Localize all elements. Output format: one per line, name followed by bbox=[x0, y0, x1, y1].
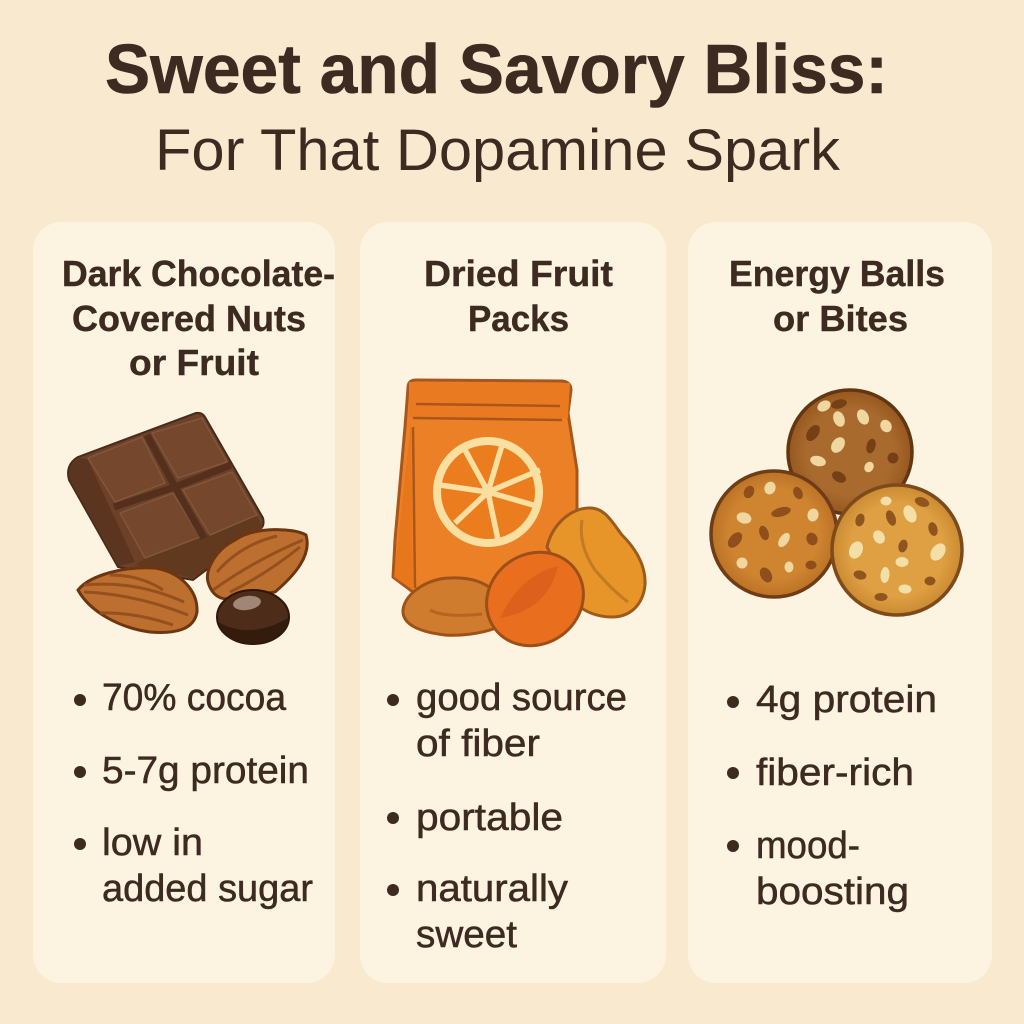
panel: dark chocolate bbox=[33, 222, 335, 983]
bullet list: chocolate: 5-7g protein bbox=[102, 750, 309, 792]
bullet list: energy balls: fiber-rich bbox=[756, 752, 914, 794]
bullet list: dried fruit: of fiber bbox=[416, 723, 540, 765]
panel: energy balls bbox=[688, 222, 992, 983]
heading: dried fruit: Packs bbox=[468, 298, 569, 339]
heading: energy balls: or Bites bbox=[773, 298, 908, 339]
heading: energy balls bbox=[729, 253, 945, 339]
heading: dried fruit: Dried Fruit bbox=[424, 253, 613, 294]
heading: dark chocolate: or Fruit bbox=[129, 342, 259, 383]
heading: dark chocolate bbox=[62, 253, 335, 383]
heading: energy balls: Energy Balls bbox=[729, 253, 945, 294]
bullet list: dried fruit: portable bbox=[416, 797, 563, 839]
panel: dried fruit bbox=[360, 222, 666, 983]
title bbox=[105, 30, 888, 183]
title: Sweet and Savory Bliss: bbox=[105, 30, 888, 108]
bullet list: chocolate: added sugar bbox=[102, 868, 313, 910]
bullet list: energy balls bbox=[727, 679, 937, 913]
bullet list: energy balls: 4g protein bbox=[756, 679, 937, 721]
bullet list: dried fruit: good source bbox=[416, 677, 627, 719]
bullet list: dried fruit bbox=[387, 677, 627, 956]
bullet list: chocolate bbox=[74, 677, 313, 910]
bullet list: energy balls: boosting bbox=[756, 871, 909, 913]
bullet list: dried fruit: sweet bbox=[416, 914, 517, 956]
icon: fruit bag and dried fruit bbox=[393, 380, 645, 665]
bullet list: chocolate: low in bbox=[102, 822, 203, 864]
icon: energy balls bbox=[711, 390, 962, 615]
heading: dried fruit bbox=[424, 253, 613, 339]
icon: chocolate and almonds bbox=[68, 413, 307, 644]
heading: dark chocolate: Dark Chocolate- bbox=[62, 253, 335, 294]
heading: dark chocolate: Covered Nuts bbox=[72, 298, 306, 339]
title: For That Dopamine Spark bbox=[155, 118, 841, 183]
bullet list: dried fruit: naturally bbox=[416, 868, 568, 910]
bullet list: chocolate: 70% cocoa bbox=[102, 677, 287, 719]
bullet list: energy balls: mood- bbox=[756, 825, 860, 867]
